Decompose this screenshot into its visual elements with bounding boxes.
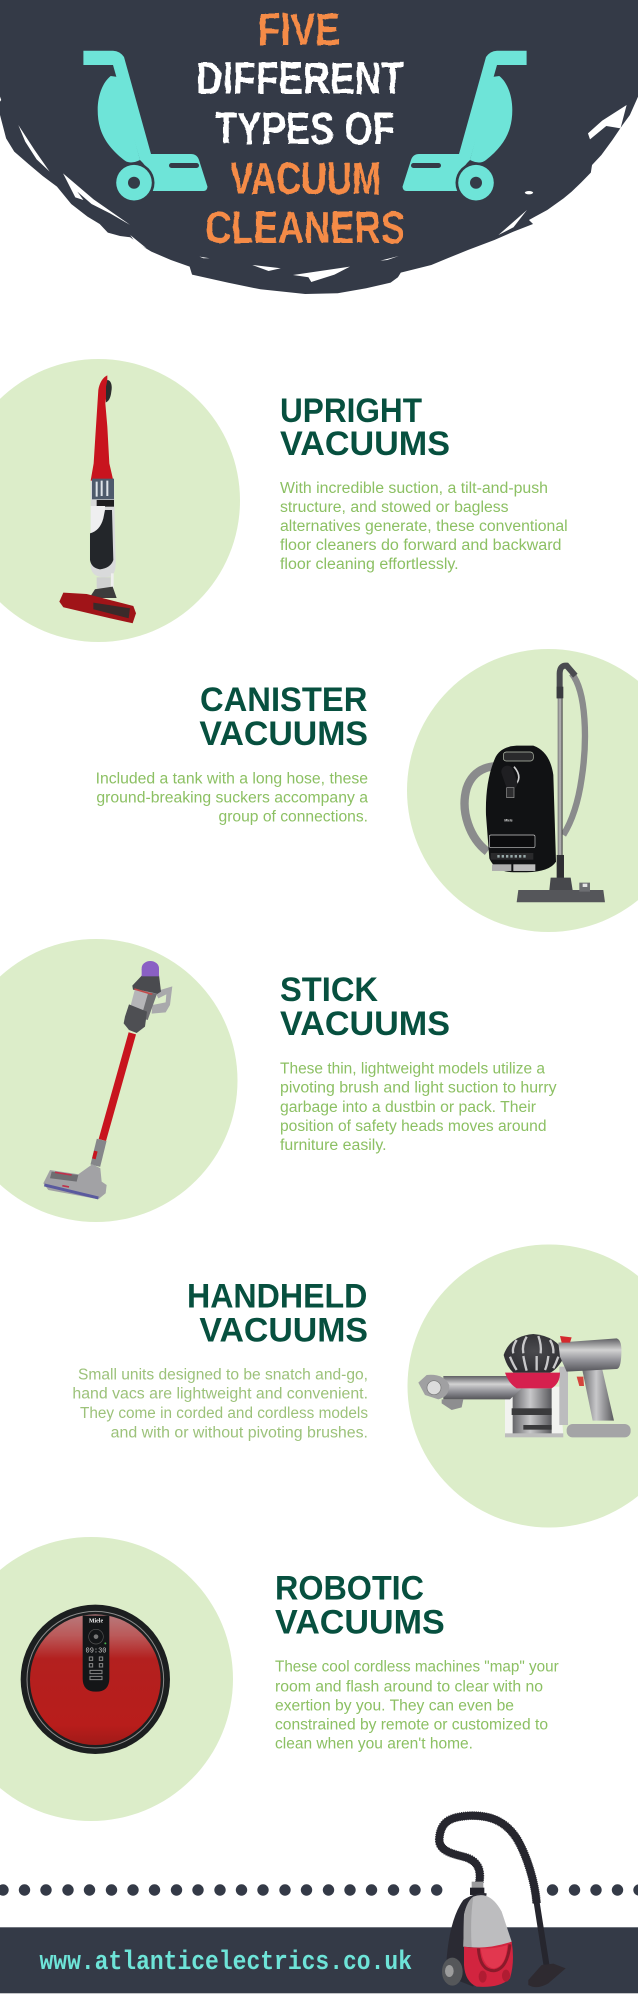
green circle	[0, 359, 240, 642]
description	[280, 480, 568, 573]
green circle	[0, 1537, 233, 1821]
description: hand vacs are lightweight and convenient.	[72, 1386, 368, 1403]
description: clean when you aren't home.	[275, 1735, 473, 1752]
robotic vacuum product	[21, 1605, 170, 1754]
heading: ROBOTIC	[275, 1569, 424, 1607]
description: pivoting brush and light suction to hurry	[280, 1080, 557, 1097]
heading	[280, 971, 450, 1043]
heading	[187, 1278, 368, 1350]
description: Small units designed to be snatch and-go,	[78, 1366, 368, 1383]
description: They come in corded and cordless models	[80, 1405, 368, 1422]
icon: left vacuum	[83, 51, 208, 203]
description	[275, 1658, 559, 1752]
header banner	[0, 0, 638, 294]
description: room and flash around to clear with no	[275, 1678, 543, 1695]
description: furniture easily.	[280, 1137, 386, 1154]
brush-edged dark background	[0, 0, 638, 294]
heading: VACUUMS	[280, 425, 450, 463]
canister vacuum product: Miele	[504, 818, 513, 822]
footer band	[0, 1927, 638, 1993]
heading: VACUUMS	[199, 1312, 368, 1350]
description: floor cleaners do forward and backward	[280, 537, 562, 554]
description: garbage into a dustbin or pack. Their	[280, 1099, 536, 1116]
description: Included a tank with a long hose, these	[96, 770, 368, 787]
description: constrained by remote or customized to	[275, 1716, 548, 1733]
description	[280, 1060, 557, 1154]
description: floor cleaning effortlessly.	[280, 556, 459, 573]
description	[96, 770, 368, 826]
green circle	[408, 1244, 638, 1528]
description: ground-breaking suckers accompany a	[96, 789, 368, 806]
panel: handheld vacuums	[72, 1244, 638, 1528]
green circle	[0, 939, 238, 1222]
canister vacuum product	[465, 666, 605, 902]
title: TYPES OF	[215, 103, 395, 154]
heading	[280, 392, 450, 463]
heading: VACUUMS	[275, 1603, 445, 1641]
robotic vacuum product: Miele	[89, 1618, 103, 1624]
title	[196, 4, 405, 253]
panel: stick vacuums	[0, 939, 557, 1222]
description: These cool cordless machines "map" your	[275, 1658, 559, 1675]
handheld vacuum product	[418, 1334, 631, 1437]
panel: canister vacuums	[96, 649, 638, 932]
title: DIFFERENT	[196, 53, 404, 104]
description: alternatives generate, these conventional	[280, 518, 568, 535]
description	[72, 1366, 368, 1441]
footer url: www.atlanticelectrics.co.uk	[40, 1948, 412, 1978]
dotted divider	[0, 1884, 638, 1896]
description: exertion by you. They can even be	[275, 1697, 514, 1714]
description: position of safety heads moves around	[280, 1118, 546, 1135]
icon: right vacuum	[402, 51, 527, 203]
panel: upright vacuums	[0, 359, 568, 642]
heading	[199, 681, 368, 753]
heading: CANISTER	[200, 681, 367, 719]
heading: UPRIGHT	[280, 392, 422, 430]
green circle	[407, 649, 638, 932]
stick vacuum product	[43, 961, 172, 1199]
description: and with or without pivoting brushes.	[111, 1424, 368, 1441]
robotic vacuum product: 09:30	[86, 1647, 106, 1655]
heading: STICK	[280, 971, 378, 1009]
panel: robotic vacuums	[0, 1537, 559, 1821]
title: FIVE	[258, 4, 340, 55]
description: With incredible suction, a tilt-and-push	[280, 480, 548, 497]
heading	[275, 1569, 445, 1641]
heading: VACUUMS	[280, 1005, 450, 1043]
description: These thin, lightweight models utilize a	[280, 1060, 545, 1077]
title: VACUUM	[230, 153, 381, 204]
heading: HANDHELD	[187, 1278, 367, 1316]
description: structure, and stowed or bagless	[280, 499, 509, 516]
upright vacuum product	[59, 375, 136, 623]
heading: VACUUMS	[199, 715, 368, 753]
description: group of connections.	[218, 808, 368, 826]
icon: cylinder vacuum illustration	[439, 1816, 566, 1987]
title: CLEANERS	[205, 202, 405, 253]
